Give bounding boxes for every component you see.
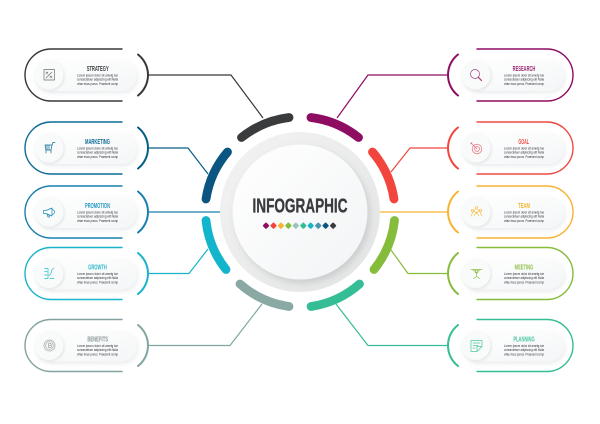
heading: GOAL bbox=[518, 139, 529, 146]
text block: consectetuer adipiscing elit Nulla bbox=[77, 78, 118, 82]
card: team bbox=[448, 186, 573, 238]
card: goal bbox=[448, 122, 573, 174]
icon: magnifier bbox=[470, 70, 482, 80]
color dots bbox=[262, 222, 337, 229]
heading: PROMOTION bbox=[85, 203, 110, 210]
title: INFOGRAPHIC bbox=[252, 194, 348, 218]
text block: Lorem ipsum dolor sit ametg tue bbox=[77, 74, 118, 78]
white disc bbox=[232, 144, 368, 280]
card outline bbox=[477, 248, 573, 300]
text block: Lorem ipsum dolor sit ametg tue bbox=[504, 74, 544, 78]
icon: shopping cart bbox=[45, 142, 55, 153]
icon circle bbox=[462, 331, 490, 360]
icon: growth chart bbox=[44, 268, 54, 278]
left arc bbox=[448, 192, 458, 232]
heading: STRATEGY bbox=[87, 66, 109, 73]
icon circle bbox=[34, 60, 64, 90]
icon circle bbox=[462, 60, 490, 90]
card: strategy bbox=[25, 49, 148, 101]
heading: BENEFITS bbox=[87, 336, 108, 344]
left arc bbox=[448, 325, 458, 366]
inner pill bbox=[462, 258, 564, 290]
text block: consectetuer adipiscing elit Nulla bbox=[504, 151, 544, 155]
card outline bbox=[477, 49, 573, 101]
text block: vitae risus purus. Praesent comp bbox=[77, 155, 118, 159]
left arc bbox=[448, 253, 458, 294]
icon circle bbox=[462, 134, 490, 162]
text block: Lorem ipsum dolor sit ametg tue bbox=[77, 210, 118, 214]
icon circle bbox=[34, 134, 64, 162]
inner pill bbox=[35, 133, 137, 164]
card outline bbox=[25, 186, 122, 238]
icon: team bbox=[471, 207, 482, 216]
text block: Lorem ipsum dolor sit ametg tue bbox=[504, 272, 544, 276]
text block: consectetuer adipiscing elit Nulla bbox=[504, 276, 544, 280]
card: planning bbox=[448, 320, 573, 372]
card outline bbox=[25, 248, 122, 300]
heading: PLANNING bbox=[513, 336, 535, 344]
text block: vitae risus purus. Praesent comp bbox=[504, 155, 544, 159]
inner pill bbox=[35, 330, 137, 362]
text block: Lorem ipsum dolor sit ametg tue bbox=[504, 210, 544, 214]
icon: meeting bbox=[471, 270, 482, 278]
card outline bbox=[477, 320, 573, 372]
inner pill bbox=[462, 133, 564, 164]
card: benefits bbox=[25, 320, 148, 372]
icon circle bbox=[462, 198, 490, 226]
text block: consectetuer adipiscing elit Nulla bbox=[504, 348, 544, 352]
outer arc segments bbox=[206, 118, 394, 306]
text block: Lorem ipsum dolor sit ametg tue bbox=[77, 146, 118, 150]
card: research bbox=[448, 49, 573, 101]
inner pill bbox=[35, 197, 137, 228]
icon circle bbox=[34, 198, 64, 226]
heading: GROWTH bbox=[88, 264, 107, 272]
inner pill bbox=[462, 330, 564, 362]
icon: target bbox=[470, 142, 482, 154]
text block: consectetuer adipiscing elit Nulla bbox=[77, 276, 118, 280]
outer ring bbox=[220, 132, 380, 292]
right arc bbox=[138, 253, 148, 294]
card: growth bbox=[25, 248, 148, 300]
left arc bbox=[448, 54, 458, 96]
heading: MARKETING bbox=[85, 139, 110, 146]
heading: RESEARCH bbox=[513, 66, 535, 73]
inner pill bbox=[462, 197, 564, 228]
text block: vitae risus purus. Praesent comp bbox=[504, 352, 544, 356]
heading: TEAM bbox=[518, 203, 530, 210]
icon: note bbox=[471, 340, 482, 352]
text block: Lorem ipsum dolor sit ametg tue bbox=[77, 272, 118, 276]
inner pill bbox=[35, 258, 137, 290]
right arc bbox=[138, 325, 148, 366]
card outline bbox=[25, 49, 122, 101]
card outline bbox=[477, 186, 573, 238]
icon circle bbox=[34, 259, 64, 288]
text block: vitae risus purus. Praesent comp bbox=[77, 280, 118, 284]
center circle bbox=[220, 132, 380, 292]
icon: strategy board bbox=[44, 70, 54, 80]
text block: consectetuer adipiscing elit Nulla bbox=[504, 78, 544, 82]
icon circle bbox=[34, 331, 64, 360]
text block: consectetuer adipiscing elit Nulla bbox=[77, 215, 118, 219]
text block: vitae risus purus. Praesent comp bbox=[77, 352, 118, 356]
text block: vitae risus purus. Praesent comp bbox=[504, 219, 544, 223]
card outline bbox=[477, 122, 573, 174]
card outline bbox=[25, 122, 122, 174]
text block: Lorem ipsum dolor sit ametg tue bbox=[77, 344, 118, 348]
text block: Lorem ipsum dolor sit ametg tue bbox=[504, 146, 544, 150]
right arc bbox=[138, 192, 148, 232]
connector lines bbox=[148, 75, 448, 346]
inner pill bbox=[35, 60, 137, 91]
text block: Lorem ipsum dolor sit ametg tue bbox=[504, 344, 544, 348]
inner pill bbox=[462, 60, 564, 91]
card: promotion bbox=[25, 186, 148, 238]
text block: consectetuer adipiscing elit Nulla bbox=[504, 215, 544, 219]
icon circle bbox=[462, 259, 490, 288]
heading: MEETING bbox=[515, 264, 534, 272]
left arc bbox=[448, 128, 458, 168]
icon: megaphone bbox=[44, 208, 55, 217]
icon: coin bbox=[44, 340, 55, 351]
card: marketing bbox=[25, 122, 148, 174]
text block: consectetuer adipiscing elit Nulla bbox=[77, 348, 118, 352]
text block: vitae risus purus. Praesent comp bbox=[77, 82, 118, 86]
text block: vitae risus purus. Praesent comp bbox=[504, 82, 544, 86]
text block: vitae risus purus. Praesent comp bbox=[504, 280, 544, 284]
text block: consectetuer adipiscing elit Nulla bbox=[77, 151, 118, 155]
right arc bbox=[138, 54, 148, 96]
card outline bbox=[25, 320, 122, 372]
card: meeting bbox=[448, 248, 573, 300]
right arc bbox=[138, 128, 148, 168]
text block: vitae risus purus. Praesent comp bbox=[77, 219, 118, 223]
